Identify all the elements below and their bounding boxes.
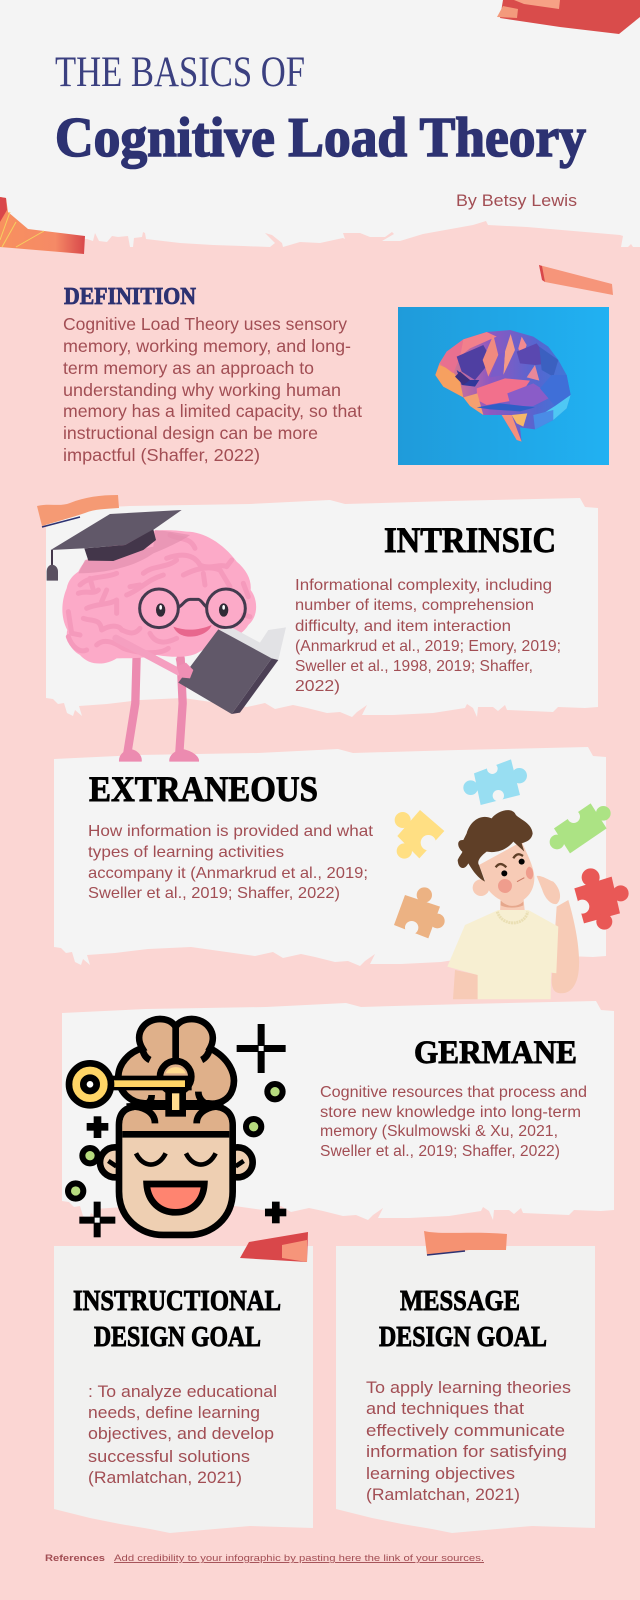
heading: INSTRUCTIONAL: [73, 1285, 281, 1317]
intrinsic body: difficulty, and item interaction: [295, 618, 511, 635]
title: [55, 49, 586, 169]
mouth: [517, 878, 524, 882]
extraneous body: Sweller et al., 2019; Shaffer, 2022): [88, 885, 340, 902]
illustration: head with brain and key: [68, 1019, 286, 1237]
definition body: memory, working memory, and long-: [63, 336, 351, 356]
header band: [0, 0, 640, 247]
title line 2: Cognitive Load Theory: [55, 107, 586, 169]
body: effectively communicate: [366, 1421, 565, 1440]
arm: [453, 900, 579, 999]
tape: left: [0, 197, 85, 254]
puzzle piece: blue: [463, 759, 527, 805]
eyes: [136, 1153, 216, 1165]
face: [479, 842, 534, 903]
germane body: memory (Skulmowski & Xu, 2021,: [320, 1123, 558, 1140]
body: To apply learning theories: [366, 1378, 571, 1397]
ear details: [108, 1161, 244, 1166]
illustration: brain character: [47, 510, 286, 762]
intrinsic body: Sweller et al., 1998, 2019; Shaffer,: [295, 658, 533, 675]
forehead: [122, 1110, 229, 1132]
eyes and brows: [496, 854, 525, 876]
definition body: memory has a limited capacity, so that: [63, 401, 362, 421]
keyhole: [160, 1061, 191, 1113]
puzzle piece: orange: [394, 887, 445, 938]
body: successful solutions: [88, 1447, 250, 1466]
tape: definition: [539, 265, 613, 295]
body: [366, 1378, 571, 1504]
brain: [118, 1019, 234, 1104]
intrinsic body: Informational complexity, including: [295, 577, 552, 594]
heading: [379, 1285, 547, 1353]
brain folds: [68, 535, 250, 653]
definition text block: [63, 284, 362, 465]
intrinsic body: (Anmarkrud et al., 2019; Emory, 2019;: [295, 638, 561, 655]
hand: [537, 876, 560, 904]
definition body: instructional design can be more: [63, 423, 318, 443]
dots: [68, 1084, 283, 1199]
legs: [127, 655, 183, 753]
hair: [458, 810, 533, 882]
heading: MESSAGE: [400, 1285, 520, 1317]
intrinsic body: [295, 577, 561, 695]
hat shadow: [78, 530, 190, 573]
brain detail lines: [122, 1025, 229, 1134]
book spine: [232, 658, 278, 714]
extraneous body: types of learning activities: [88, 844, 284, 861]
germane body: Cognitive resources that process and: [320, 1084, 587, 1101]
cheeks: [498, 867, 533, 893]
body: : To analyze educational: [88, 1382, 277, 1401]
sparkle centre: [95, 1046, 264, 1223]
body: (Ramlatchan, 2021): [88, 1468, 242, 1487]
body: and techniques that: [366, 1399, 524, 1418]
ears: [100, 1147, 253, 1177]
eyes: [156, 603, 228, 617]
definition heading: DEFINITION: [64, 284, 197, 310]
key: [69, 1063, 192, 1105]
references: [45, 1553, 484, 1564]
extraneous heading: EXTRANEOUS: [89, 769, 318, 809]
panel: germane: [62, 1001, 614, 1220]
byline: By Betsy Lewis: [456, 191, 577, 210]
tape: instructional: [240, 1232, 308, 1262]
extraneous body: [88, 823, 374, 902]
germane heading: GERMANE: [414, 1035, 577, 1071]
panel background: [336, 1246, 595, 1533]
panel background: [46, 498, 598, 717]
book pages: [218, 627, 286, 660]
image: low-poly brain: [398, 307, 609, 465]
intrinsic body: number of items, comprehension: [295, 597, 534, 614]
panel background: [54, 1246, 313, 1533]
tape: top right: [497, 0, 640, 34]
hand: [177, 663, 193, 678]
body: objectives, and develop: [88, 1424, 274, 1443]
book cover: [178, 629, 272, 714]
germane body: Sweller et al., 2019; Shaffer, 2022): [320, 1143, 560, 1160]
extraneous body: accompany it (Anmarkrud et al., 2019;: [88, 865, 368, 882]
body: [88, 1382, 277, 1487]
germane body: [320, 1084, 587, 1160]
intrinsic heading: INTRINSIC: [384, 520, 556, 560]
mouth: [147, 1184, 204, 1212]
feet: [119, 749, 199, 762]
tape: intrinsic: [37, 495, 119, 527]
tape: message: [424, 1231, 507, 1255]
definition body: [63, 314, 362, 465]
extraneous body: How information is provided and what: [88, 823, 374, 840]
puzzle piece: green: [550, 803, 611, 853]
mouth: [173, 625, 212, 637]
tie: [176, 657, 184, 672]
title line 1: THE BASICS OF: [55, 49, 305, 96]
brain body: [62, 530, 256, 664]
definition body: understanding why working human: [63, 380, 341, 400]
puzzle piece: red: [574, 868, 629, 930]
germane body: store new knowledge into long-term: [320, 1104, 581, 1121]
heading: DESIGN GOAL: [379, 1321, 547, 1353]
heading: DESIGN GOAL: [94, 1321, 261, 1353]
necklace: [497, 912, 528, 923]
head: [119, 1107, 233, 1235]
references label: References: [45, 1553, 105, 1564]
sparkle: [79, 1024, 286, 1237]
arm: [116, 638, 178, 672]
glasses: [140, 589, 245, 628]
panel background: [62, 1001, 614, 1220]
graduation cap: [47, 510, 182, 581]
body: (Ramlatchan, 2021): [366, 1485, 520, 1504]
definition body: Cognitive Load Theory uses sensory: [63, 314, 347, 334]
panel: message design goal: [336, 1246, 595, 1533]
panel: intrinsic: [46, 498, 598, 717]
illustration: thinking person with puzzle pieces: [394, 759, 629, 999]
body: needs, define learning: [88, 1403, 260, 1422]
body: learning objectives: [366, 1464, 515, 1483]
definition body: term memory as an approach to: [63, 358, 314, 378]
body: information for satisfying: [366, 1442, 567, 1461]
panel background: [54, 747, 606, 966]
references link: Add credibility to your infographic by pasting here the link of your sources.: [114, 1553, 484, 1564]
heading: [73, 1285, 281, 1353]
panel: extraneous: [54, 747, 606, 966]
panel: instructional design goal: [54, 1246, 313, 1533]
definition body: impactful (Shaffer, 2022): [63, 445, 260, 465]
plus signs: [87, 1116, 286, 1223]
ear: [473, 879, 489, 896]
puzzle piece: yellow: [395, 810, 444, 859]
intrinsic body: 2022): [295, 678, 340, 695]
neck: [500, 897, 525, 913]
shirt: [447, 910, 558, 999]
